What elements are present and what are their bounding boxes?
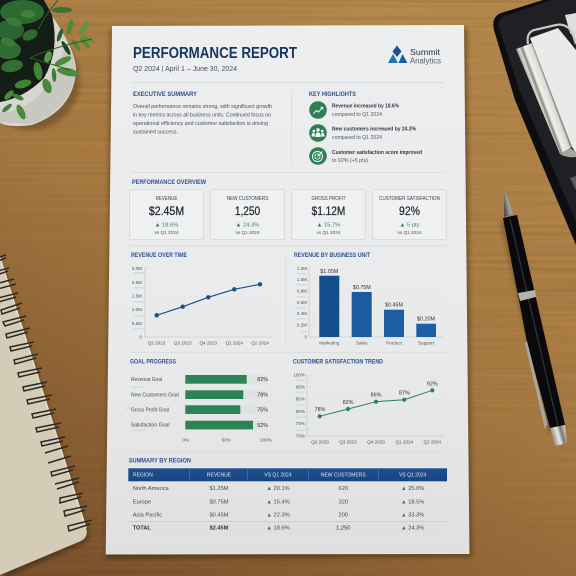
- summary paragraph: Overall performance remains strong, with significant growth: [133, 104, 272, 110]
- chart: goal progress: [125, 358, 272, 442]
- heading: KEY HIGHLIGHTS: [309, 91, 357, 98]
- KPI card: new customers: 1,250: [235, 204, 261, 218]
- chart: revenue by business unit: 0.4M: [297, 311, 307, 316]
- row: north america: North America: [133, 486, 170, 492]
- icon: people: [309, 124, 327, 142]
- KPI card: revenue: $2.45M: [149, 204, 184, 218]
- KPI card: revenue: REVENUE: [156, 196, 178, 202]
- KPI card: customer satisfaction: CUSTOMER SATISFACTION: [379, 196, 440, 202]
- row: total: $2.45M: [210, 526, 229, 532]
- bar: sales: [352, 285, 372, 346]
- table header: NEW CUSTOMERS: [321, 473, 366, 479]
- chart: revenue over time: 1.5M: [132, 294, 142, 298]
- bar: sales: $0.75M: [353, 285, 371, 291]
- summary paragraph: in key metrics across all business units. Continued focus on: [133, 113, 271, 119]
- logo: Summit Analytics: Analytics: [410, 56, 441, 66]
- chart: revenue over time: 3.0M: [132, 266, 142, 271]
- chart: revenue over time: 0: [139, 334, 142, 340]
- row: total: 1,250: [336, 526, 350, 532]
- heading: SUMMARY BY REGION: [129, 458, 191, 465]
- table: summary by region: [128, 458, 447, 534]
- clipboard paper: [530, 28, 576, 153]
- KPI card: gross profit: vs Q1 2024: [317, 230, 341, 235]
- highlight: satisfaction: Customer satisfaction score improved: [332, 150, 422, 156]
- pen tip: [504, 191, 514, 217]
- panel: executive summary: [133, 91, 272, 135]
- bar: product: Product: [386, 340, 403, 346]
- row: europe: ▲ 18.5%: [401, 499, 424, 505]
- chart: revenue over time: Q4 2023: [199, 340, 218, 346]
- panel: key highlights: [309, 91, 422, 165]
- table header: VS Q1 2024: [264, 473, 292, 479]
- highlight: customers: [309, 124, 416, 142]
- chart: revenue by business unit: 0: [304, 334, 307, 340]
- table header: REVENUE: [207, 473, 232, 479]
- highlight: revenue: compared to Q1 2024: [332, 112, 382, 118]
- heading: GOAL PROGRESS: [130, 358, 177, 365]
- chart: customer satisfaction trend: 78%: [315, 407, 326, 413]
- row: asia pacific: ▲ 22.3%: [266, 513, 290, 519]
- chart: revenue over time: [131, 252, 272, 346]
- row: europe: 320: [339, 499, 348, 505]
- clipboard with metal clip: [493, 0, 576, 245]
- row: asia pacific: [133, 513, 424, 519]
- chart: revenue over time: Q1 2024: [225, 340, 244, 346]
- goal: new customers: 78%: [257, 392, 268, 398]
- subtitle: Q2 2024 | April 1 – June 30, 2024: [133, 64, 237, 73]
- row: total: TOTAL: [133, 526, 151, 532]
- KPI card: new customers: [210, 190, 284, 240]
- chart: customer satisfaction trend: 82%: [343, 400, 354, 406]
- chart: revenue by business unit: 0.2M: [297, 322, 307, 328]
- chart: goal progress: 100%: [260, 437, 272, 442]
- chart: customer satisfaction trend: [293, 358, 445, 445]
- highlight: customers: compared to Q1 2024: [332, 135, 382, 141]
- chart: customer satisfaction trend: Q4 2023: [367, 440, 385, 445]
- title: PERFORMANCE REPORT: [133, 45, 297, 62]
- chart: customer satisfaction trend: 85%: [296, 397, 305, 402]
- KPI card: customer satisfaction: [372, 190, 446, 240]
- row: europe: Europe: [133, 499, 151, 505]
- logo wordmark: Summit: [410, 48, 441, 57]
- row: north america: [133, 486, 424, 492]
- KPI card: customer satisfaction: ▲ 5 pts: [400, 222, 420, 228]
- goal: revenue: [131, 375, 268, 384]
- summary paragraph: operational efficiency and customer satisfaction is driving: [133, 121, 268, 127]
- icon: target: [309, 147, 327, 165]
- highlight: customers: New customers increased by 24.3%: [332, 126, 416, 132]
- bar: sales: Sales: [356, 340, 368, 346]
- row: total: ▲ 24.3%: [401, 526, 424, 532]
- table header: VS Q1 2024: [399, 473, 427, 479]
- chart: customer satisfaction trend: Q2 2023: [311, 440, 329, 445]
- goal: satisfaction: 92%: [257, 423, 268, 429]
- chart: customer satisfaction trend: 70%: [296, 433, 305, 438]
- KPI card: gross profit: ▲ 15.7%: [317, 222, 340, 228]
- goal: gross profit: 75%: [257, 408, 268, 414]
- chart: customer satisfaction trend: Q3 2023: [339, 440, 357, 445]
- table header: [128, 468, 447, 481]
- chart: customer satisfaction trend: Q1 2024: [395, 440, 414, 445]
- pen band: [518, 290, 536, 301]
- row: asia pacific: ▲ 33.3%: [401, 513, 424, 519]
- heading: CUSTOMER SATISFACTION TREND: [293, 358, 383, 365]
- goal: new customers: [131, 390, 268, 399]
- chart: revenue over time: 0.5M: [132, 321, 142, 326]
- logo icon: [388, 46, 408, 63]
- chart: revenue by business unit: 0.6M: [297, 300, 307, 305]
- chart: customer satisfaction trend: 87%: [399, 391, 410, 397]
- chart: revenue over time: Q2 2024: [251, 340, 269, 346]
- bar: product: $0.45M: [385, 303, 403, 309]
- chart: revenue by business unit: [294, 252, 443, 346]
- row: europe: $0.75M: [210, 499, 229, 505]
- goal: satisfaction: Satisfaction Goal: [130, 423, 170, 429]
- chart: customer satisfaction trend: 100%: [293, 373, 305, 378]
- goal: revenue: Revenue Goal: [131, 377, 162, 383]
- chart: revenue by business unit: 0.8M: [297, 288, 307, 294]
- row: europe: [133, 499, 424, 505]
- KPI card: gross profit: GROSS PROFIT: [312, 196, 346, 202]
- KPI card: revenue: vs Q1 2024: [155, 230, 179, 235]
- KPI card: revenue: ▲ 18.6%: [155, 222, 178, 228]
- chart: revenue over time: Q2 2023: [148, 340, 166, 346]
- bar: support: [416, 317, 436, 346]
- plant in white pot: [0, 0, 95, 130]
- pen end cap: [550, 425, 567, 446]
- row: asia pacific: 200: [339, 513, 348, 519]
- bar: support: $0.20M: [417, 317, 435, 323]
- chart: revenue by business unit: 1.2M: [297, 266, 307, 271]
- icon: trend line: [309, 101, 327, 119]
- chart: revenue over time: 2.5M: [132, 280, 142, 285]
- KPI card: customer satisfaction: 92%: [399, 204, 420, 218]
- chart: customer satisfaction trend: 95%: [296, 384, 305, 389]
- KPI card: new customers: NEW CUSTOMERS: [227, 196, 269, 202]
- goal: gross profit: [131, 405, 268, 414]
- row: total: ▲ 18.6%: [266, 526, 290, 532]
- chart: customer satisfaction trend: 75%: [296, 421, 305, 426]
- chart: customer satisfaction trend: 86%: [371, 393, 382, 399]
- row: total: [128, 521, 447, 534]
- chart: revenue over time: 1.0M: [132, 307, 142, 312]
- KPI card: new customers: ▲ 24.3%: [236, 222, 259, 228]
- chart: revenue over time: Q3 2023: [174, 340, 192, 346]
- chart: customer satisfaction trend: 80%: [296, 409, 305, 414]
- chart: goal progress: 50%: [222, 437, 231, 442]
- row: asia pacific: Asia Pacific: [133, 513, 162, 519]
- heading: performance overview: PERFORMANCE OVERVIEW: [132, 179, 207, 186]
- KPI card: revenue: [130, 190, 204, 240]
- pen clip: [525, 342, 547, 428]
- pen: [500, 191, 567, 446]
- row: north america: 620: [339, 486, 348, 492]
- bar: product: [384, 303, 404, 346]
- bar: marketing: Marketing: [319, 340, 340, 346]
- row: north america: ▲ 25.0%: [401, 486, 424, 492]
- heading: EXECUTIVE SUMMARY: [133, 91, 198, 98]
- KPI card: gross profit: $1.12M: [312, 204, 345, 218]
- summary paragraph: sustained success.: [133, 129, 178, 135]
- logo: Summit Analytics: [388, 46, 441, 66]
- highlight: satisfaction: to 92% (+5 pts): [332, 158, 368, 164]
- row: asia pacific: $0.45M: [210, 513, 229, 519]
- satisfaction line: [318, 388, 434, 418]
- revenue line: [154, 282, 262, 317]
- highlight: revenue: Revenue increased by 18.6%: [332, 103, 399, 109]
- bar: marketing: $1.05M: [320, 269, 339, 275]
- bar: marketing: [319, 269, 340, 346]
- chart: revenue by business unit: 1.0M: [297, 277, 307, 282]
- row: europe: ▲ 15.4%: [266, 499, 290, 505]
- bar: support: Support: [418, 340, 435, 346]
- goal: revenue: 82%: [257, 377, 268, 383]
- heading: REVENUE OVER TIME: [131, 252, 188, 259]
- chart: customer satisfaction trend: Q2 2024: [423, 440, 442, 445]
- notebook with spiral binding: [0, 255, 92, 576]
- goal: gross profit: Gross Profit Goal: [131, 407, 169, 413]
- KPI card: gross profit: [292, 190, 365, 240]
- chart: customer satisfaction trend: 92%: [427, 381, 438, 387]
- paper shadow: [106, 28, 472, 559]
- pen barrel: [503, 215, 565, 428]
- summary paragraph: [133, 104, 272, 135]
- heading: REVENUE BY BUSINESS UNIT: [294, 252, 370, 259]
- report page: [106, 25, 469, 554]
- table header: REGION: [133, 473, 153, 479]
- KPI card: customer satisfaction: vs Q1 2024: [398, 230, 422, 235]
- KPI card: new customers: vs Q1 2024: [236, 230, 260, 235]
- row: north america: ▲ 20.1%: [266, 486, 290, 492]
- highlight: satisfaction: [309, 147, 422, 165]
- row: north america: $1.25M: [210, 486, 229, 492]
- goal: new customers: New Customers Goal: [131, 392, 179, 398]
- goal: satisfaction: [130, 421, 268, 429]
- highlight: revenue: [309, 101, 399, 119]
- chart: goal progress: 0%: [182, 437, 189, 442]
